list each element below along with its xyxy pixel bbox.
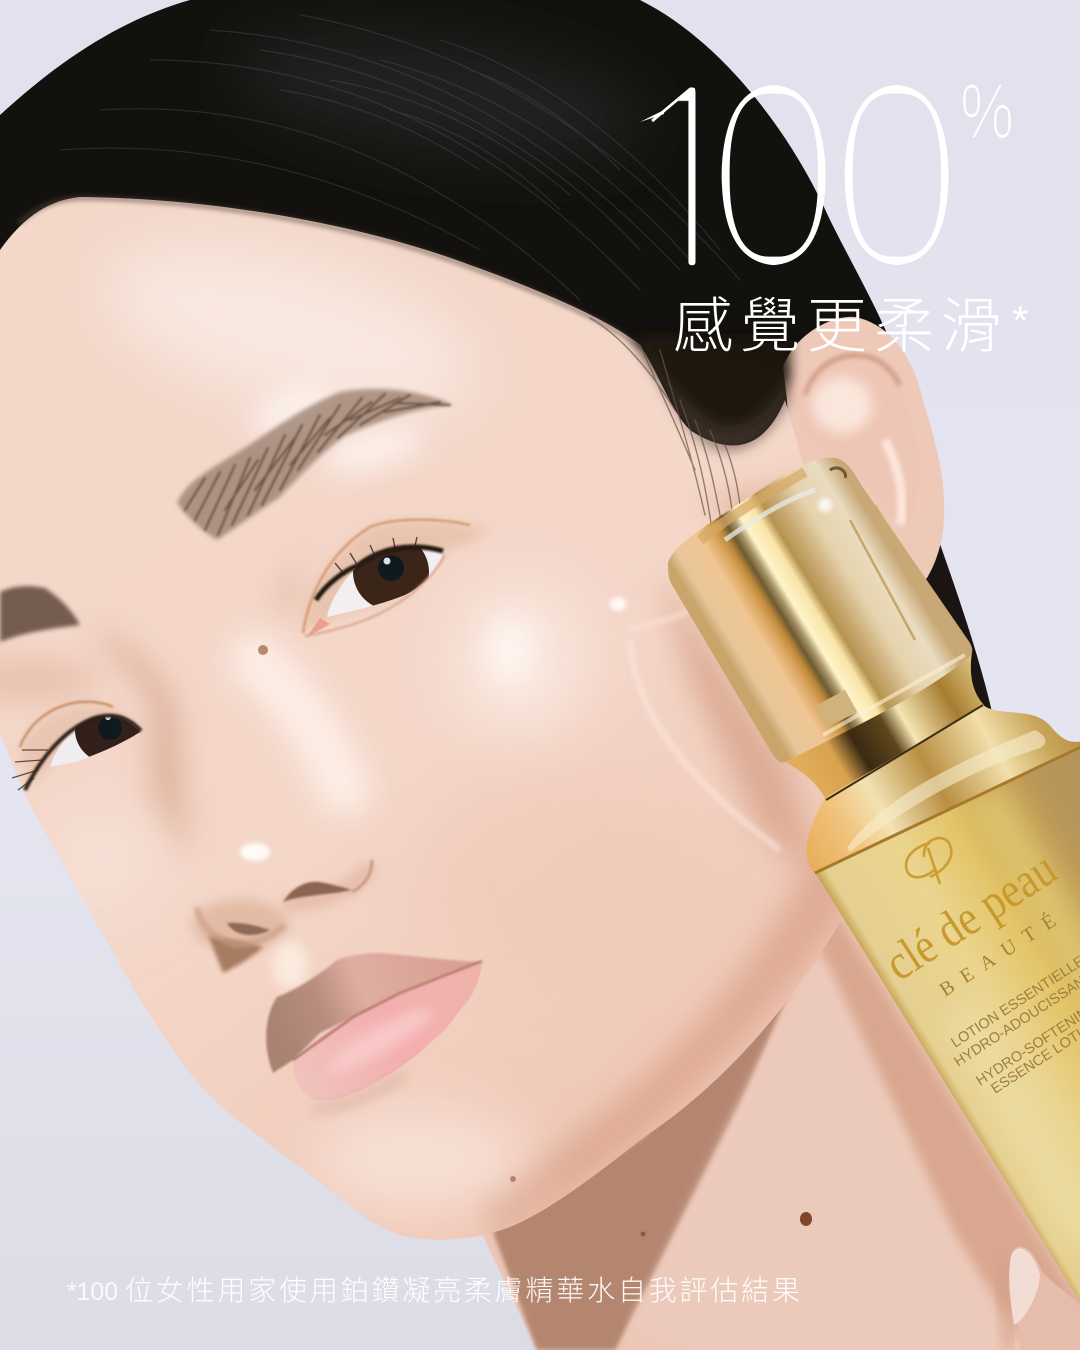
neck (480, 880, 1080, 1350)
footnote: 位女性用家使用鉑鑽凝亮柔膚精華水自我評估結果 (125, 1275, 800, 1306)
subheading: * (1012, 297, 1028, 344)
bottle neck (778, 652, 984, 798)
socket shading (90, 625, 190, 860)
product bottle: BEAUTÉ (935, 903, 1069, 1001)
eye: left (12, 696, 149, 790)
subheading: 感覺更柔滑 (673, 293, 1008, 360)
face (0, 197, 850, 1240)
headline: 100%: 0 (826, 56, 966, 303)
headline: 100%: 1 (609, 56, 759, 304)
hair (0, 0, 992, 712)
bottle cap (668, 458, 972, 763)
headline: 100% (609, 56, 1014, 304)
lips (266, 953, 482, 1110)
serum streak (630, 640, 780, 850)
hand (1000, 1247, 1080, 1350)
product bottle (668, 458, 1080, 1310)
footnote: *100 (67, 1278, 118, 1306)
mole (258, 645, 268, 655)
eyebrow: right (177, 389, 453, 540)
highlights (106, 238, 472, 419)
hair wisps (20, 198, 790, 530)
ear (783, 317, 944, 640)
eyebrow: left (0, 586, 80, 642)
brand logo (906, 838, 951, 884)
headline: 100%: 0 (703, 56, 843, 303)
bottle shoulder (806, 705, 1080, 874)
nose (197, 843, 372, 989)
under-nose shading (192, 899, 288, 951)
headline: 100%: % (960, 68, 1014, 155)
eye: right (303, 520, 490, 637)
jaw shading (478, 856, 843, 1234)
bottle body (815, 740, 1080, 1310)
moles: neck (510, 1176, 812, 1236)
